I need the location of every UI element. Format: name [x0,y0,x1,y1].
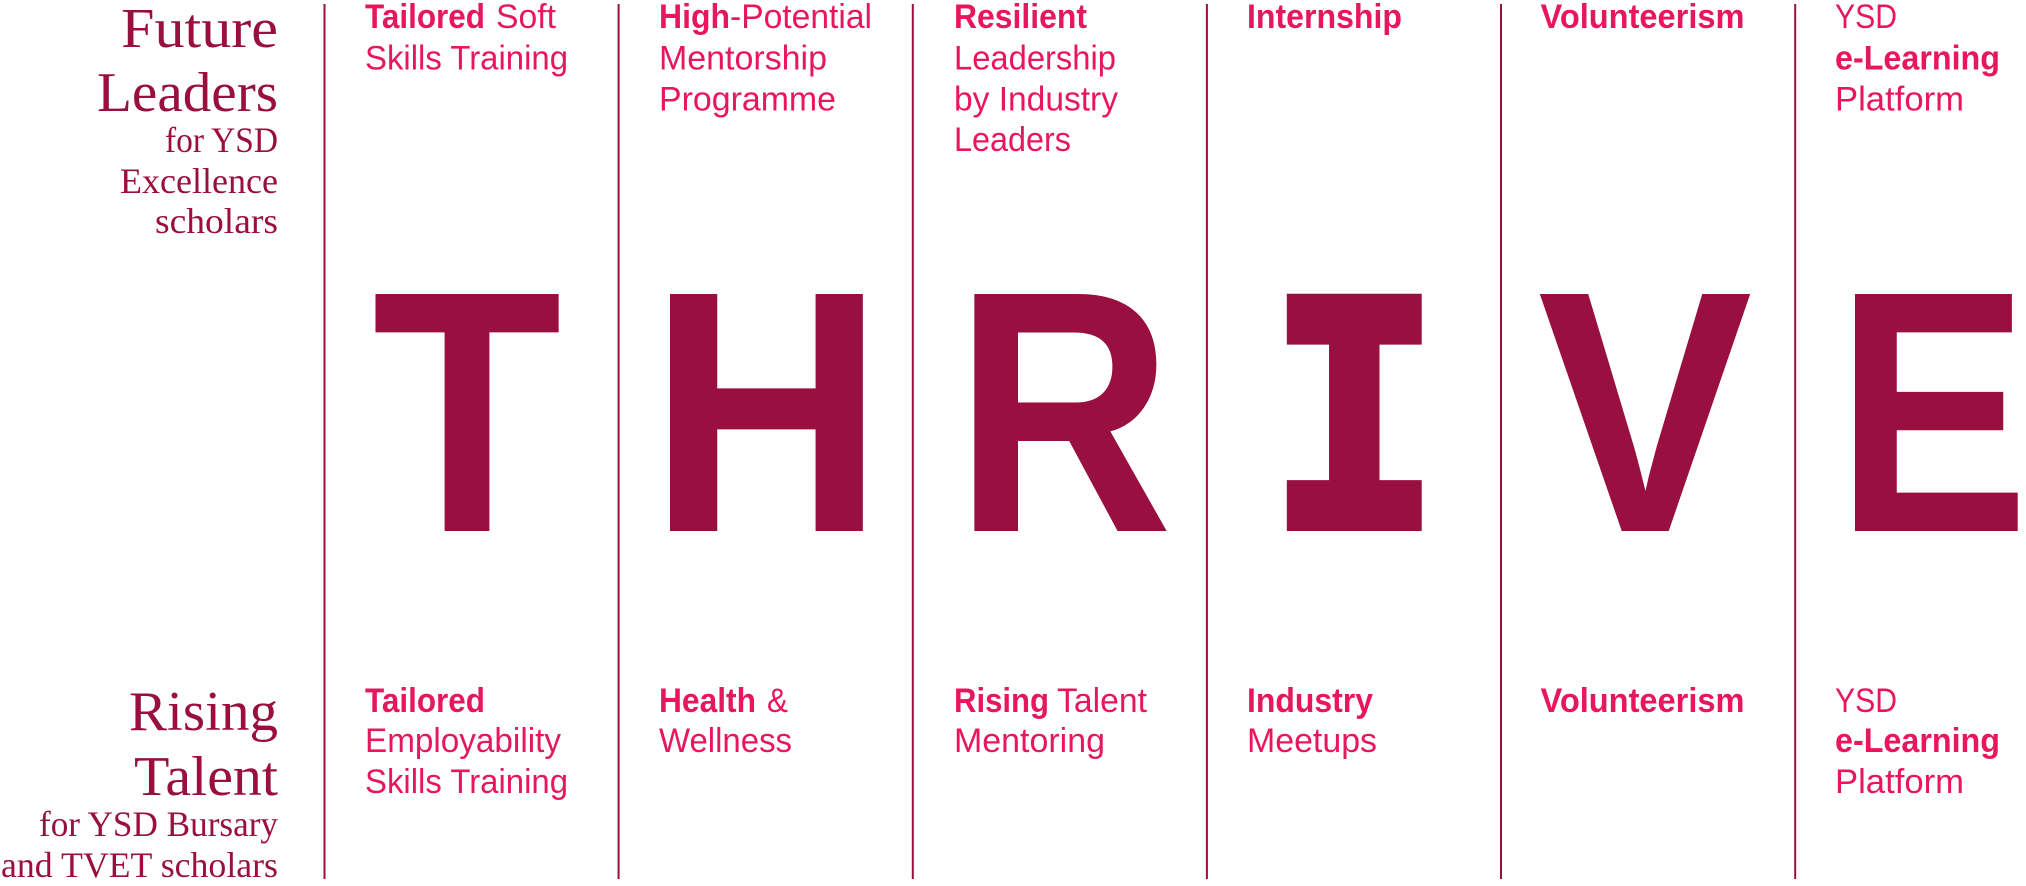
bottom programme: Health & Wellness: & [767,682,788,720]
bottom programme: YSD e-Learning Platform [1835,682,2000,801]
heading: Future Leaders: Excellence [120,161,278,201]
bottom programme: Tailored Employability Skills Training: Skills Training [365,763,568,801]
bottom programme: Tailored Employability Skills Training: Tailored [365,682,485,720]
heading: Future Leaders: Leaders [97,62,278,124]
heading: Rising Talent: for YSD Bursary [39,804,278,844]
bottom programme: Health & Wellness: Health [659,682,756,720]
letter R: R [954,219,1173,604]
top programme: Resilient Leadership by Industry Leaders [954,0,1118,159]
letter V: V [1538,219,1754,604]
THRIVE wordmark [372,219,2026,627]
bottom programme: Industry Meetups [1247,682,1377,760]
bottom programme: Industry Meetups: Industry [1247,682,1373,720]
bottom programme: Rising Talent Mentoring: Talent [1057,682,1148,720]
top programme: Tailored Soft Skills Training: Skills Training [365,40,568,78]
top programme: Resilient Leadership by Industry Leaders: by Industry [954,80,1118,118]
letter I: I [1271,242,1438,627]
heading: Rising Talent: and TVET scholars [1,845,278,885]
letter H: H [648,221,885,605]
top programme: YSD e-Learning Platform: Platform [1835,80,1964,118]
bottom programme: Health & Wellness [659,682,792,760]
bottom programme: Rising Talent Mentoring: Mentoring [954,722,1105,760]
bottom programme: YSD e-Learning Platform: Platform [1835,763,1964,801]
heading: Rising Talent: Talent [134,746,278,808]
bottom programme: Volunteerism: Volunteerism [1540,682,1744,720]
bottom programme: Rising Talent Mentoring: Rising [954,682,1049,720]
top programme: High-Potential Mentorship Programme: Programme [659,80,836,118]
letter T: T [372,219,562,604]
top programme: Resilient Leadership by Industry Leaders: Leaders [954,121,1071,159]
top programme: Tailored Soft Skills Training [365,0,568,78]
letter E: E [1836,220,2026,605]
bottom programme: Rising Talent Mentoring [954,682,1148,760]
top programme: High-Potential Mentorship Programme: Mentorship [659,40,827,78]
bottom programme: Health & Wellness: Wellness [659,722,792,760]
bottom programme: YSD e-Learning Platform: e-Learning [1835,722,2000,760]
heading: Rising Talent: Rising [129,681,278,743]
top programme: Resilient Leadership by Industry Leaders: Leadership [954,40,1116,78]
top programme: YSD e-Learning Platform [1835,0,2000,118]
heading: Future Leaders: scholars [155,201,278,241]
bottom programme: YSD e-Learning Platform: YSD [1835,682,1897,720]
top programme: High-Potential Mentorship Programme [659,0,872,118]
bottom programme: Industry Meetups: Meetups [1247,722,1377,760]
heading: Future Leaders [97,0,278,241]
heading: Future Leaders: for YSD [165,120,278,160]
heading: Rising Talent [1,681,278,885]
bottom programme: Tailored Employability Skills Training: Employability [365,722,561,760]
bottom programme: Tailored Employability Skills Training [365,682,568,801]
top programme: YSD e-Learning Platform: e-Learning [1835,40,2000,78]
